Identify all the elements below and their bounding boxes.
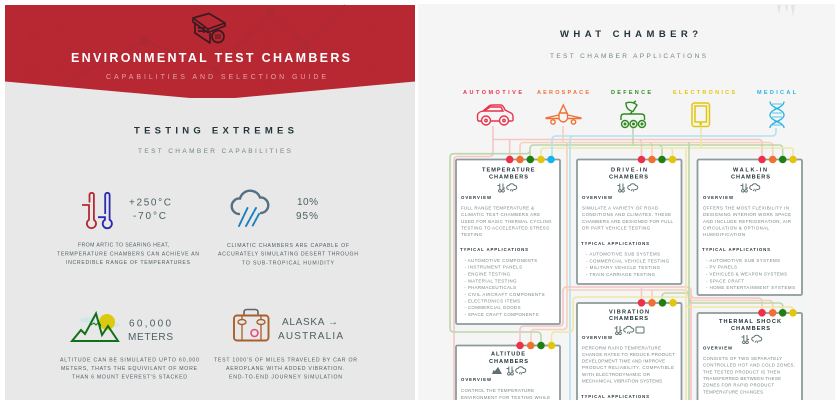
icon: rover xyxy=(621,101,646,128)
card title: CHAMBERS xyxy=(609,316,648,322)
overview: PRODUCT RELIABILITY. COMPATIBLE xyxy=(582,365,674,370)
card: altitude chambers xyxy=(456,346,560,400)
card title: CHAMBERS xyxy=(489,174,528,180)
description xyxy=(218,243,358,266)
overview xyxy=(703,195,791,237)
stat values: 95% xyxy=(296,211,318,222)
typical applications: - AUTOMOTIVE COMPONENTS xyxy=(464,258,537,263)
card title: ALTITUDE xyxy=(491,352,525,358)
stat values: METERS xyxy=(128,332,173,343)
typical applications: - INSTRUMENT PANELS xyxy=(464,265,522,270)
description: ALTITUDE CAN BE SIMULATED UPTO 60,000 xyxy=(60,358,199,364)
application: defence xyxy=(611,90,651,128)
typical applications: - ELECTRONICS ITEMS xyxy=(464,298,520,304)
connector lines xyxy=(450,126,793,400)
description: THAN 6 MOUNT EVEREST'S STACKED xyxy=(72,375,187,381)
typical applications: - PHARMACEUTICALS xyxy=(464,285,516,290)
card: temperature chambers xyxy=(456,160,560,324)
typical applications: - ENGINE TESTING xyxy=(464,272,511,277)
stat values: -70°C xyxy=(133,211,166,222)
card title xyxy=(731,168,770,180)
icon: suitcase xyxy=(234,310,268,340)
card icons xyxy=(492,366,526,375)
card icons xyxy=(742,335,762,344)
overview: CONTROLLED HOT AND COLD ZONES. xyxy=(703,363,795,368)
description: CLIMATIC CHAMBERS ARE CAPABLE OF xyxy=(227,243,349,249)
card title xyxy=(609,168,648,180)
description: TERMPERATURE CHAMBERS CAN ACHIEVE AN xyxy=(57,251,199,257)
heading: what chamber: WHAT CHAMBER? xyxy=(560,29,698,40)
card: vibration chambers xyxy=(577,303,682,400)
card: drive-in chambers xyxy=(577,160,682,284)
icon: tablet xyxy=(692,103,710,126)
typical applications xyxy=(581,241,670,277)
label: AEROSPACE xyxy=(537,90,589,96)
stat values xyxy=(278,317,343,342)
card title: DRIVE-IN xyxy=(611,168,647,174)
description: TO SUB-TROPICAL HUMIDITY xyxy=(242,260,335,266)
typical applications: - SPACE CRAFT COMPONENTS xyxy=(464,312,539,317)
overview: MECHANICAL VIBRATION SYSTEMS xyxy=(582,378,662,384)
card title xyxy=(609,309,649,322)
label: AUTOMOTIVE xyxy=(463,90,522,96)
overview: THE TESTED PRODUCT IS THEN xyxy=(703,369,780,374)
overview xyxy=(582,335,675,384)
typical applications: - COMMERCIAL GOODS xyxy=(464,305,521,310)
overview: CLIMATIC TEST CHAMBERS ARE xyxy=(461,212,540,217)
subheading: capabilities: TEST CHAMBER CAPABILITIES xyxy=(138,148,292,155)
typical applications: - CIVIL AIRCRAFT COMPONENTS xyxy=(464,292,545,297)
card title xyxy=(719,319,781,332)
typical applications: - HOME ENTERTAINMENT SYSTEMS xyxy=(706,285,795,290)
card: walk-in chambers xyxy=(698,160,802,295)
application: electronics xyxy=(673,90,735,126)
typical applications: - TRAIN CARRIAGE TESTING xyxy=(586,272,656,277)
application: aerospace xyxy=(537,90,589,124)
overview: OFFERS THE MOST FLEXIBILITY IN xyxy=(703,206,789,210)
typical applications: - MATERIAL TESTING xyxy=(464,278,517,284)
overview: OVERVIEW xyxy=(703,346,733,350)
application: medical xyxy=(757,90,797,128)
overview: OVERVIEW xyxy=(461,377,492,382)
faint chart backdrop: 20 xyxy=(25,62,39,77)
overview xyxy=(461,195,552,237)
overview: FULL RANGE TEMPERATURE & xyxy=(461,206,534,210)
overview xyxy=(461,377,550,400)
label: DEFENCE xyxy=(611,90,651,96)
card title: CHAMBERS xyxy=(731,174,770,180)
typical applications: - VEHICLES & WEAPON SYSTEMS xyxy=(706,272,787,277)
card title: CHAMBERS xyxy=(731,326,770,332)
card title: THERMAL SHOCK xyxy=(719,319,781,325)
card icons xyxy=(614,326,644,335)
card title: CHAMBERS xyxy=(609,174,648,180)
overview: SIMULATE A VARIETY OF ROAD xyxy=(582,206,658,210)
typical applications xyxy=(702,247,795,290)
typical applications: TYPICAL APPLICATIONS xyxy=(581,394,649,399)
stat values: ALASKA → xyxy=(282,317,338,328)
overview: TESTING xyxy=(461,232,483,237)
overview: USED FOR BASIC THERMAL CYCLING xyxy=(461,219,552,224)
panel: right background xyxy=(418,4,835,400)
typical applications: - MILITARY VEHICLE TESTING xyxy=(586,265,661,270)
overview xyxy=(582,195,674,230)
overview: CONSISTS OF TWO SEPARATELY xyxy=(703,356,782,361)
overview: OVERVIEW xyxy=(703,195,734,200)
block: altitude xyxy=(60,314,199,381)
description: END-TO-END JOURNEY SIMULATION xyxy=(229,375,342,381)
overview: CHAMBERS ARE DESIGNED FOR FULL xyxy=(582,219,674,224)
description: METERS, THATS THE EQUIVILANT OF MORE xyxy=(61,366,198,372)
label: MEDICAL xyxy=(757,90,797,96)
icon: plane xyxy=(546,105,582,124)
block: journey xyxy=(214,310,357,381)
card title xyxy=(489,352,528,365)
description: FROM ARTIC TO SEARING HEAT, xyxy=(78,243,169,249)
overview: DESIGNING INTERIOR WORK SPACE xyxy=(703,212,791,217)
stat values: +250°C xyxy=(129,198,171,208)
subheading: applications: TEST CHAMBER APPLICATIONS xyxy=(550,53,707,60)
card title: CHAMBERS xyxy=(489,359,528,365)
icon: thermometers xyxy=(82,193,112,228)
typical applications: - SPACE CRAFT xyxy=(706,278,744,284)
card icons xyxy=(740,184,760,192)
overview: AND INCLUDE REFRIGERATION, AIR xyxy=(703,219,791,224)
icon: test chamber xyxy=(193,14,225,43)
card: thermal shock chambers xyxy=(698,313,802,400)
overview: CONDITIONS AND CLIMATES. THESE xyxy=(582,212,671,217)
stat values: 60,000 xyxy=(129,318,171,330)
stat values xyxy=(129,198,171,222)
header banner xyxy=(5,5,415,98)
overview: OR PART VEHICLE TESTING xyxy=(582,226,651,230)
icon: rain cloud xyxy=(232,191,268,226)
overview xyxy=(703,346,795,394)
overview: PERFORM RAPID TEMPERATURE xyxy=(582,346,661,350)
faint chart backdrop xyxy=(25,5,370,88)
overview: ENVIRONMENT FOR TESTING WHILE xyxy=(461,395,550,400)
stat values: AUSTRALIA xyxy=(278,331,343,342)
card title: TEMPERATURE xyxy=(482,168,535,174)
overview: CHANGE RATES TO REDUCE PRODUCT xyxy=(582,352,675,357)
title: ENVIRONMENTAL TEST CHAMBERS xyxy=(71,51,350,65)
card title: VIBRATION xyxy=(609,309,649,315)
overview: TESTING TO ACCELERATED STRESS xyxy=(461,226,549,230)
overview: OVERVIEW xyxy=(582,335,613,340)
overview: TEMPERATURE CHANGES xyxy=(703,389,763,394)
icon: dna xyxy=(770,102,784,128)
block: temperature xyxy=(57,193,199,266)
typical applications: - AUTOMOTIVE SUB SYSTEMS xyxy=(706,258,780,263)
typical applications: TYPICAL APPLICATIONS xyxy=(460,247,528,252)
description: ACCURATELY SIMULATING DESERT THROUGH xyxy=(218,252,358,258)
description: TEST 1000'S OF MILES TRAVELED BY CAR OR xyxy=(214,358,357,364)
typical applications: TYPICAL APPLICATIONS xyxy=(581,241,649,246)
panel: left background xyxy=(5,5,415,400)
typical applications: - COMMERCIAL VEHICLE TESTING xyxy=(586,258,670,263)
overview: OVERVIEW xyxy=(461,195,492,200)
overview: HUMIDIFICATION xyxy=(703,232,745,237)
connector dots xyxy=(506,156,797,349)
faint chart backdrop: 30 xyxy=(25,29,39,44)
stat values xyxy=(296,197,318,222)
description xyxy=(214,358,357,381)
overview: CONTROL THE TEMPERATURE xyxy=(461,388,534,393)
label: ELECTRONICS xyxy=(673,90,735,96)
card title: WALK-IN xyxy=(733,168,767,174)
application: automotive xyxy=(463,90,522,125)
description: INCREDIBLE RANGE OF TEMPERATURES xyxy=(66,260,191,266)
overview: CIRCULATION & OPTIONAL xyxy=(703,226,770,230)
typical applications: - PV PANELS xyxy=(706,265,737,270)
overview: OVERVIEW xyxy=(582,195,613,200)
overview: WITH ELECTRODYNAMIC OR xyxy=(582,372,650,377)
heading: testing extremes: TESTING EXTREMES xyxy=(134,126,294,136)
icon: mountains xyxy=(72,314,120,341)
overview: DEVELOPMENT TIME AND IMPROVE xyxy=(582,358,665,364)
icon: car xyxy=(478,105,513,125)
typical applications: - AUTOMOTIVE SUB SYSTEMS xyxy=(586,252,660,257)
block: humidity xyxy=(218,191,358,266)
stat values xyxy=(128,318,173,343)
card title xyxy=(482,168,535,180)
decorative smear xyxy=(777,5,795,17)
typical applications: TYPICAL APPLICATIONS xyxy=(702,247,770,252)
card icons xyxy=(498,184,517,192)
description: AEROPLANE WITH ADDED VIBRATION. xyxy=(226,366,344,372)
description xyxy=(60,358,199,381)
description xyxy=(57,243,199,266)
stat values: 10% xyxy=(297,197,318,208)
card icons xyxy=(618,184,638,192)
subtitle: CAPABILITIES AND SELECTION GUIDE xyxy=(106,74,326,81)
overview: TRANSFERRED BETWEEN THESE xyxy=(703,376,781,381)
typical applications xyxy=(460,247,545,317)
overview: ZONES FOR RAPID PRODUCT xyxy=(703,383,774,388)
